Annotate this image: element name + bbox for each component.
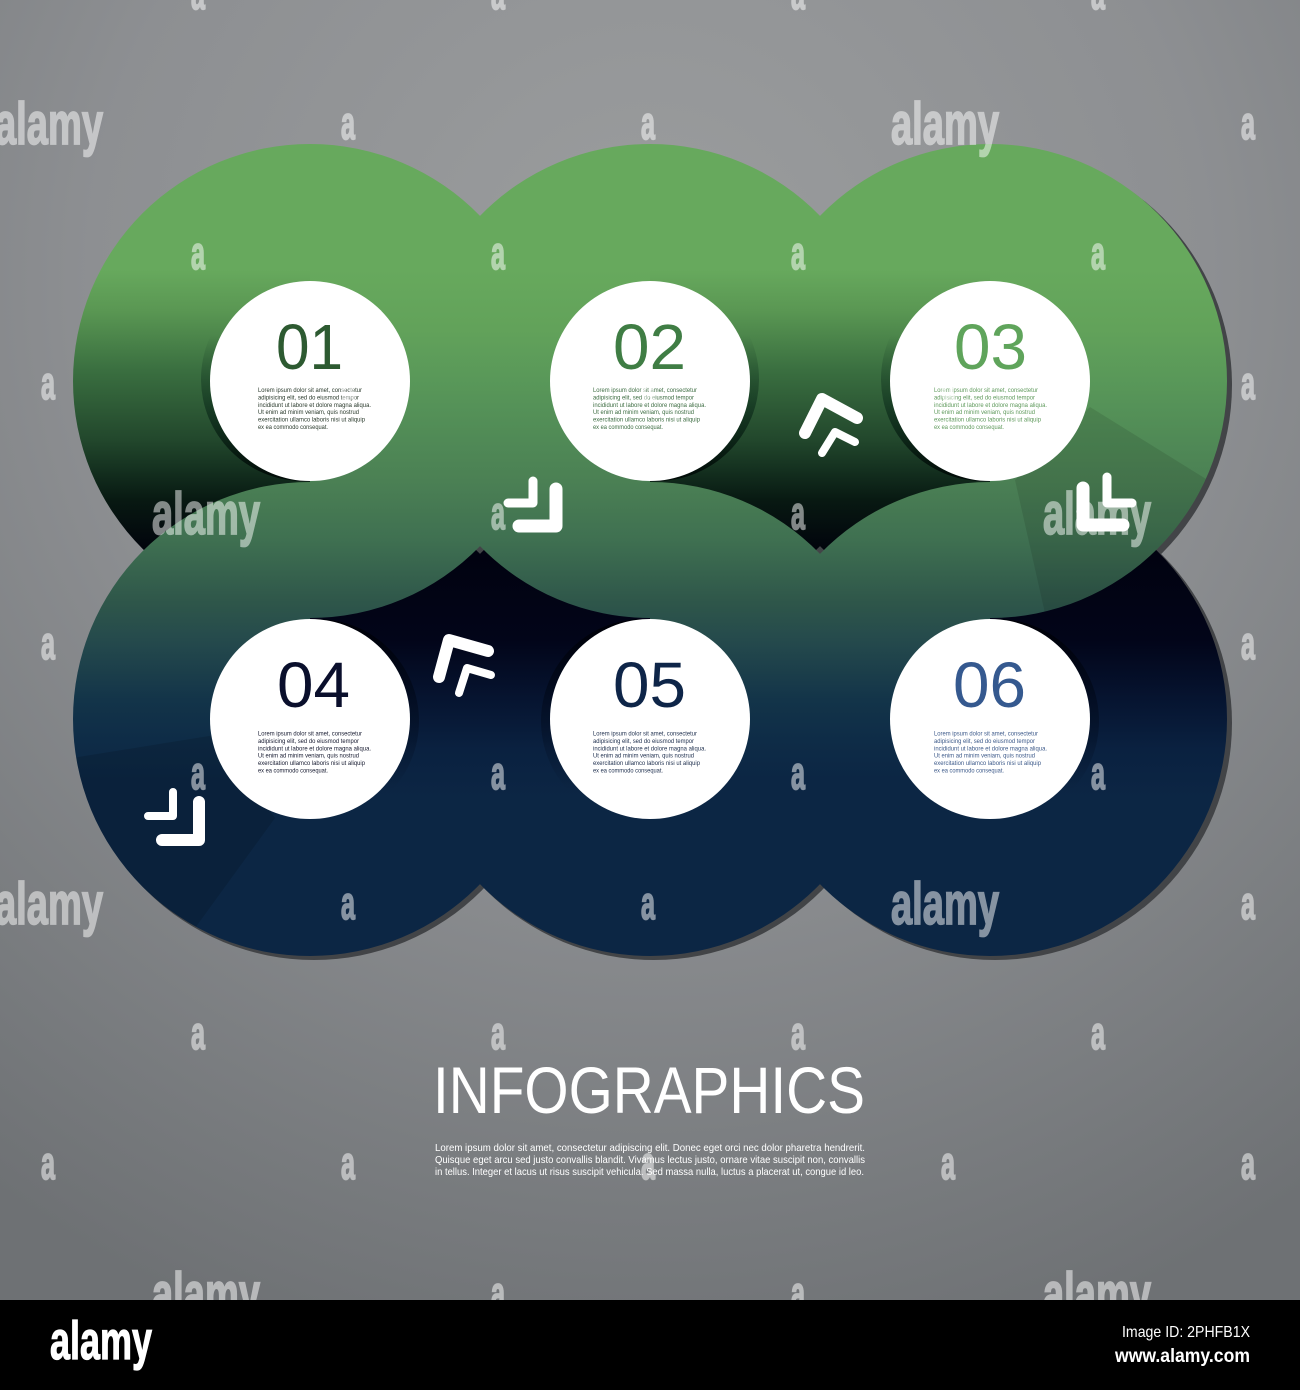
website: www.alamy.com [1114, 1346, 1250, 1367]
watermark: small a repeated: a [491, 1267, 505, 1319]
step 01 [201, 277, 410, 481]
arrow: 02 to 03 [805, 399, 857, 453]
watermark: small a repeated: a [191, 747, 205, 799]
watermark: small a repeated: a [941, 617, 955, 669]
watermark: alamy repeated: alamy [0, 91, 103, 157]
text 01: incididunt ut labore et dolore magna aliqua. [258, 402, 371, 409]
step 06 [890, 619, 1099, 823]
watermark: small a repeated: a [1241, 1137, 1255, 1189]
text 02: Lorem ipsum dolor sit amet, consectetur [593, 387, 698, 394]
step 02 [550, 277, 759, 481]
watermark: small a repeated: a [341, 1137, 355, 1189]
white disc 04 [210, 619, 410, 819]
watermark: small a repeated: a [641, 877, 655, 929]
watermark: small a repeated: a [341, 877, 355, 929]
watermark: small a repeated: a [1241, 97, 1255, 149]
watermark: alamy repeated [0, 91, 1151, 1327]
drop shadow of cluster [77, 148, 1232, 960]
watermark: small a repeated: a [791, 747, 805, 799]
watermark: small a repeated: a [791, 227, 805, 279]
text 02: Ut enim ad minim veniam, quis nostrud [593, 409, 694, 416]
white disc 01 [210, 281, 410, 481]
arrow: 06 to 05 [439, 640, 491, 693]
text 05: exercitation ullamco laboris nisi ut aliquip [593, 760, 700, 767]
text 05: incididunt ut labore et dolore magna aliqua. [593, 745, 706, 752]
watermark: small a repeated: a [341, 617, 355, 669]
watermark: alamy repeated: alamy [0, 871, 103, 937]
facet on circle 3 [1015, 407, 1206, 611]
watermark: small a repeated: a [41, 357, 55, 409]
description: in tellus. Integer et lacus ut risus suscipit vehicula. Sed massa nulla, luctus a placerat ut, congue id leo. [435, 1167, 864, 1178]
shadow 01 [201, 277, 405, 481]
text 06: Ut enim ad minim veniam, quis nostrud [934, 753, 1035, 760]
text 03: Ut enim ad minim veniam, quis nostrud [934, 409, 1035, 416]
text 04 [258, 730, 371, 774]
watermark: small a repeated: a [641, 1137, 655, 1189]
text 06: Lorem ipsum dolor sit amet, consectetur [934, 730, 1039, 738]
arrow: 03 to 06 [1083, 477, 1132, 525]
text 02: incididunt ut labore et dolore magna aliqua. [593, 402, 706, 409]
bottom row: dark halves [310, 550, 1227, 956]
watermark: small a repeated: a [341, 357, 355, 409]
step 03 [881, 277, 1090, 481]
text 04: exercitation ullamco laboris nisi ut aliquip [258, 760, 365, 767]
watermark: small a repeated: a [491, 487, 505, 539]
watermark: small a repeated: a [791, 1267, 805, 1319]
arrow: 01 to 02 [508, 481, 556, 526]
text 06 [934, 730, 1047, 774]
title: INFOGRAPHICS [433, 1053, 865, 1127]
white disc 06 [890, 619, 1090, 819]
number 02: 02 [613, 311, 686, 383]
watermark: small a repeated: a [41, 617, 55, 669]
text 04: adipisicing elit, sed do eiusmod tempor [258, 738, 360, 745]
shadow 05 [541, 619, 745, 823]
watermark: small a repeated: a [191, 1007, 205, 1059]
watermark: small a repeated: a [191, 227, 205, 279]
panel: circle cluster [60, 140, 1240, 1000]
text 06: exercitation ullamco laboris nisi ut aliquip [934, 760, 1041, 767]
description: Lorem ipsum dolor sit amet, consectetur adipiscing elit. Donec eget orci nec dolor pharetra hendrerit. [435, 1143, 865, 1154]
watermark: alamy repeated: alamy [152, 1261, 260, 1327]
watermark: small a repeated: a [1241, 877, 1255, 929]
text 02: ex ea commodo consequat. [593, 424, 663, 431]
watermark: small a repeated: a [1241, 617, 1255, 669]
watermark: small a repeated: a [1241, 357, 1255, 409]
text 01: exercitation ullamco laboris nisi ut aliquip [258, 417, 365, 424]
facet on circle 4 [76, 736, 274, 926]
text 04: Ut enim ad minim veniam, quis nostrud [258, 753, 359, 760]
text 04: incididunt ut labore et dolore magna aliqua. [258, 745, 371, 752]
watermark: small a repeated: a [491, 747, 505, 799]
text 03: Lorem ipsum dolor sit amet, consectetur [934, 387, 1039, 394]
watermark: small a repeated: a [941, 357, 955, 409]
watermark: alamy repeated: alamy [152, 481, 260, 547]
watermark: small a repeated: a [641, 617, 655, 669]
text 06: incididunt ut labore et dolore magna aliqua. [934, 745, 1047, 752]
watermark: small a repeated: a [641, 97, 655, 149]
watermark: alamy repeated: alamy [891, 91, 999, 157]
footer logo: alamy [50, 1311, 152, 1371]
watermark: small a repeated: a [41, 1137, 55, 1189]
watermark: alamy repeated: alamy [1043, 1261, 1151, 1327]
text 05: Ut enim ad minim veniam, quis nostrud [593, 753, 694, 760]
text 06: ex ea commodo consequat. [934, 768, 1004, 774]
text 05: Lorem ipsum dolor sit amet, consectetur [593, 730, 698, 738]
watermark: small a repeated: a [641, 357, 655, 409]
arrow: 05 to 04 [148, 792, 199, 840]
watermark: small a repeated: a [791, 487, 805, 539]
text 01 [258, 387, 371, 431]
watermark: small a repeated: a [491, 227, 505, 279]
number 04: 04 [277, 649, 350, 721]
step 05 [541, 619, 750, 823]
text 01: adipisicing elit, sed do eiusmod tempor [258, 394, 360, 401]
number 01: 01 [276, 311, 343, 383]
text 03: ex ea commodo consequat. [934, 424, 1004, 431]
watermark: small a repeated: a [1091, 747, 1105, 799]
text 03: exercitation ullamco laboris nisi ut aliquip [934, 417, 1041, 424]
text 01: ex ea commodo consequat. [258, 424, 328, 431]
watermark: small a repeated: a [791, 1007, 805, 1059]
text 04: ex ea commodo consequat. [258, 768, 328, 774]
text 05: ex ea commodo consequat. [593, 768, 663, 774]
watermark: small a repeated: a [941, 1137, 955, 1189]
white disc 02 [550, 281, 750, 481]
text 05: adipisicing elit, sed do eiusmod tempor [593, 738, 695, 745]
watermark: alamy repeated: alamy [1043, 481, 1151, 547]
watermark: small a repeated: a [1091, 1007, 1105, 1059]
white disc 03 [890, 281, 1090, 481]
watermark: alamy repeated: alamy [891, 871, 999, 937]
step 04 [210, 619, 419, 823]
text 05 [593, 730, 706, 774]
number 03: 03 [954, 311, 1027, 383]
footer bar [0, 1300, 1300, 1390]
text 03: adipisicing elit, sed do eiusmod tempor [934, 394, 1036, 401]
bottom row: light halves overlapping the top row [60, 470, 990, 970]
text 03: incididunt ut labore et dolore magna aliqua. [934, 402, 1047, 409]
shadow 06 [895, 619, 1099, 823]
text 02: exercitation ullamco laboris nisi ut aliquip [593, 417, 700, 424]
shadow 04 [215, 619, 419, 823]
text 02: adipisicing elit, sed do eiusmod tempor [593, 394, 695, 401]
number 06: 06 [953, 649, 1026, 721]
description: Quisque eget arcu sed justo convallis blandit. Vivamus lectus justo, ornare vitae suscipit non, convallis [435, 1155, 865, 1166]
text 01: Lorem ipsum dolor sit amet, consectetur [258, 387, 363, 394]
text 02 [593, 387, 706, 431]
text 04: Lorem ipsum dolor sit amet, consectetur [258, 730, 363, 738]
white disc 05 [550, 619, 750, 819]
shadow 02 [555, 277, 759, 481]
text 03 [934, 387, 1047, 431]
top row: alternating dark and light halves [60, 140, 1240, 630]
watermark: small a repeated: a [491, 1007, 505, 1059]
description [435, 1143, 865, 1178]
number 05: 05 [613, 649, 686, 721]
watermark: small a repeated: a [1091, 227, 1105, 279]
shadow 03 [881, 277, 1085, 481]
text 06: adipisicing elit, sed do eiusmod tempor [934, 738, 1036, 745]
watermark: small a repeated: a [341, 97, 355, 149]
image id: Image ID: 2PHFB1X [1122, 1324, 1250, 1341]
text 01: Ut enim ad minim veniam, quis nostrud [258, 409, 359, 416]
